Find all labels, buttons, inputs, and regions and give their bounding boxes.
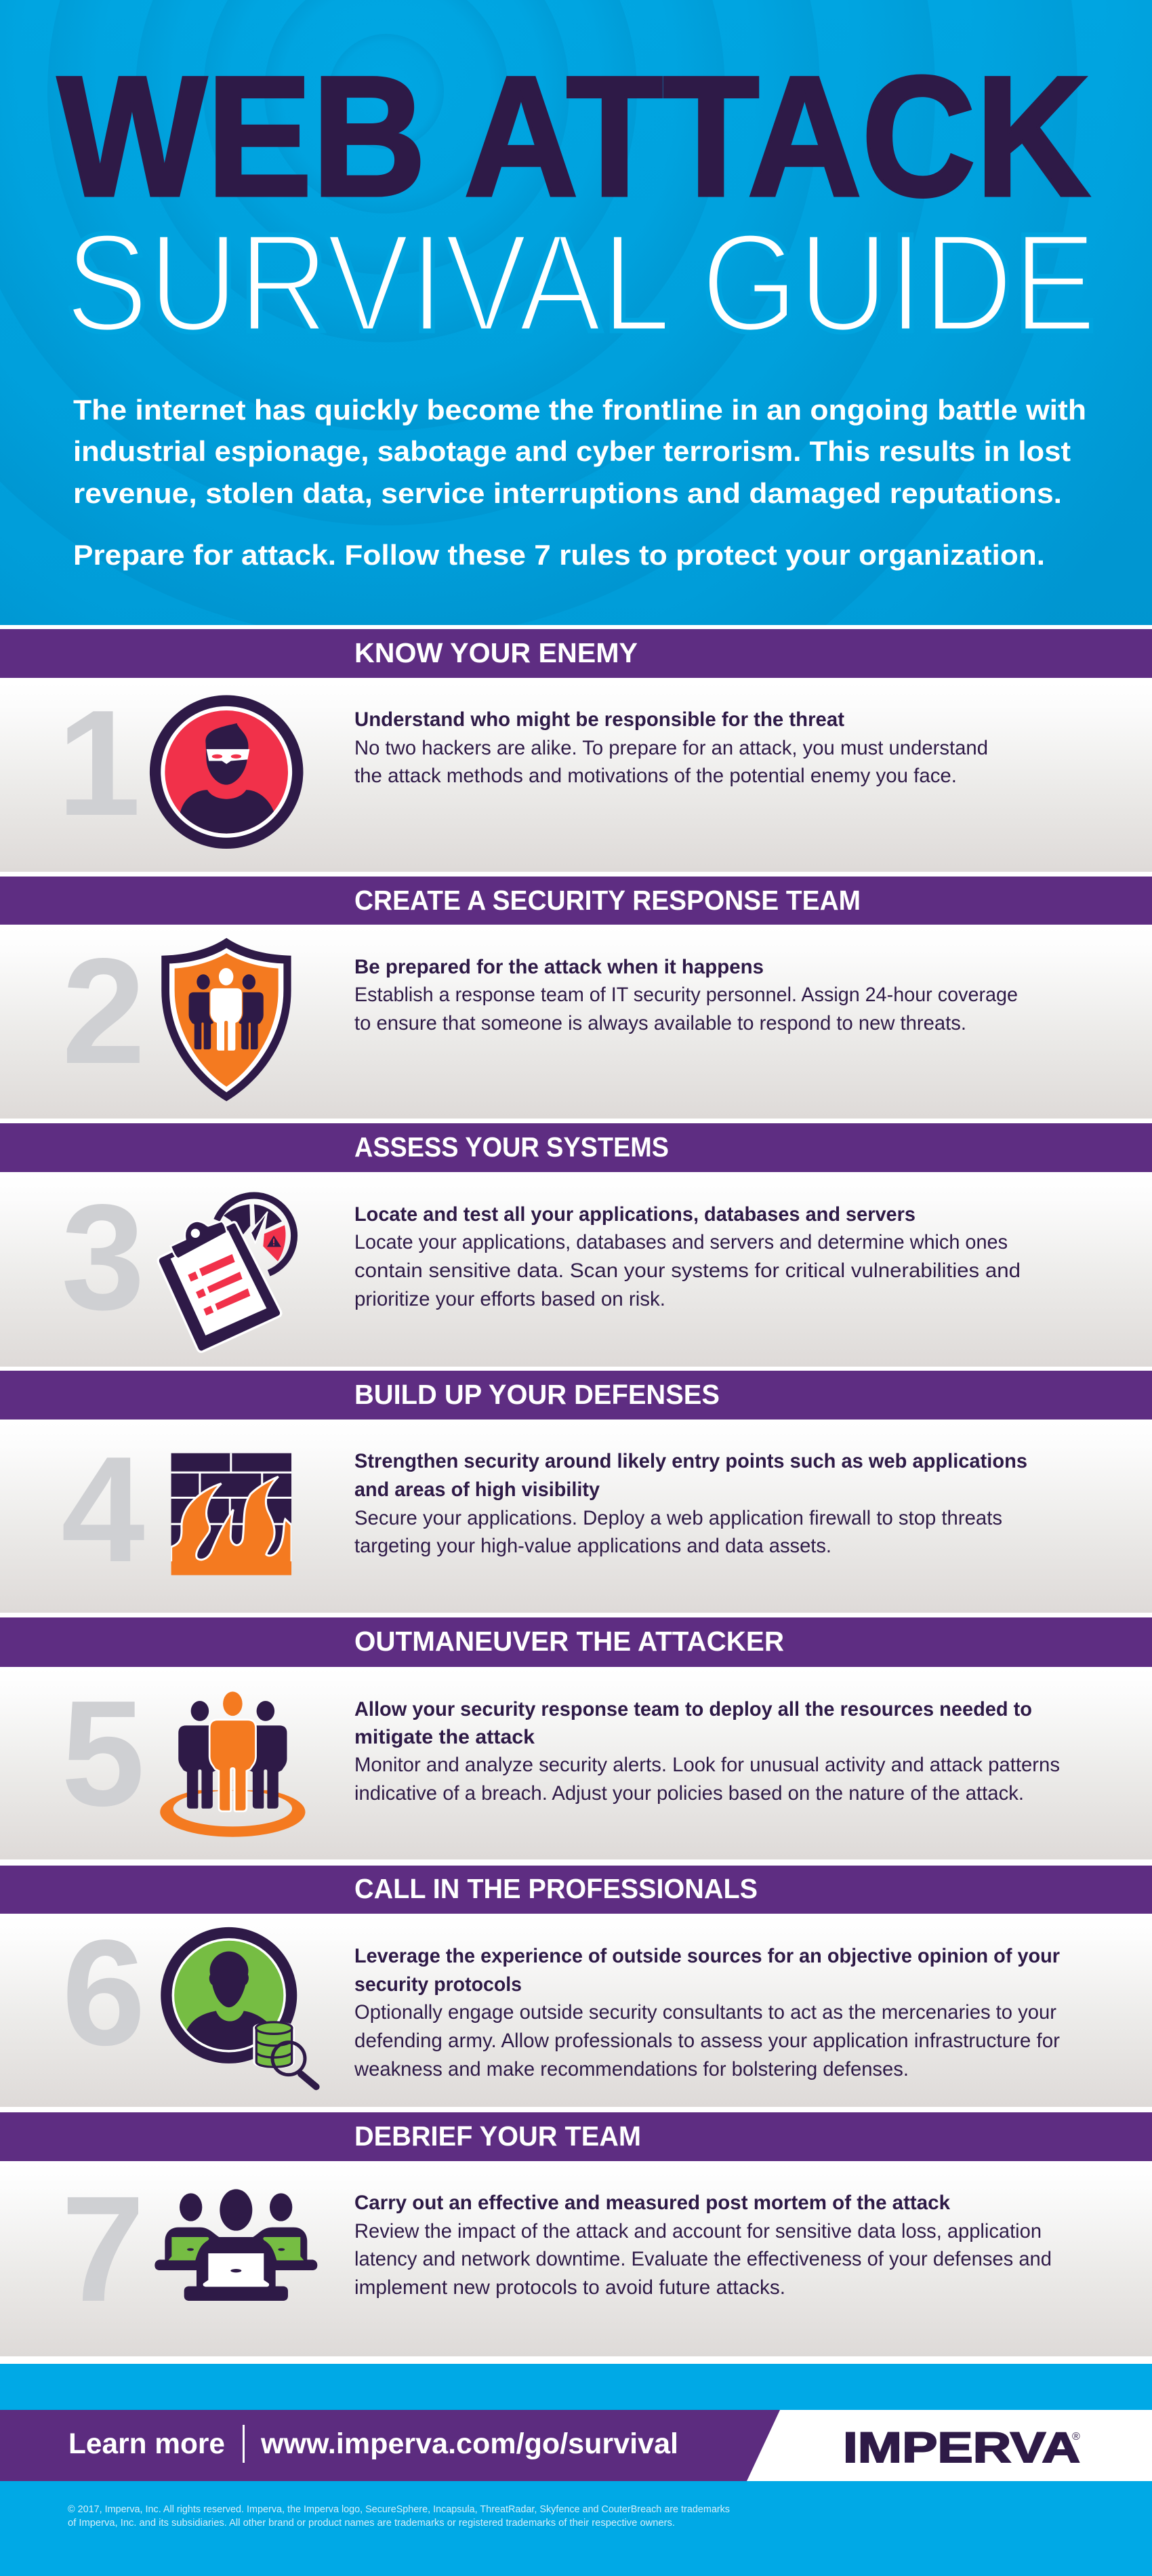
header bar 4: BUILD UP YOUR DEFENSES <box>354 1379 720 1410</box>
copyright <box>68 2503 730 2529</box>
header bar 3 <box>0 1123 1152 1172</box>
panel 6 <box>0 1916 1152 2107</box>
rule 6 text <box>354 1945 1060 2080</box>
rule 3 text: prioritize your efforts based on risk. <box>354 1288 665 1310</box>
rule 1 text <box>354 708 988 787</box>
rule 6 text: defending army. Allow professionals to assess your application infrastructure for <box>354 2030 1060 2052</box>
white logo strip <box>745 2410 1152 2481</box>
rule 5 text: Allow your security response team to deploy all the resources needed to <box>354 1698 1032 1720</box>
hero background with concentric rings <box>0 0 1152 625</box>
learn more: Learn more <box>68 2428 225 2460</box>
rule 1 text: No two hackers are alike. To prepare for an attack, you must understand <box>354 737 988 759</box>
rule 6 text: security protocols <box>354 1973 522 1996</box>
number 1: 1 <box>57 679 141 847</box>
rule 7 text: Review the impact of the attack and account for sensitive data loss, application <box>354 2220 1042 2242</box>
rule 7 text: Carry out an effective and measured post mortem of the attack <box>354 2192 950 2214</box>
intro paragraph: revenue, stolen data, service interruptions and damaged reputations. <box>73 477 1062 509</box>
number 6: 6 <box>62 1909 146 2077</box>
rule 6 text: Leverage the experience of outside sources for an objective opinion of your <box>354 1945 1060 1967</box>
rule 6 text: weakness and make recommendations for bolstering defenses. <box>354 2058 909 2080</box>
panel 3 <box>0 1175 1152 1367</box>
title: web attack: WEB ATTACK <box>58 41 1090 232</box>
section 4 <box>0 1371 1152 1613</box>
rule 4 text: and areas of high visibility <box>354 1478 600 1501</box>
number 2: 2 <box>62 927 146 1095</box>
intro paragraph: The internet has quickly become the frontline in an ongoing battle with <box>73 394 1086 426</box>
footer banner <box>0 2410 1152 2481</box>
section 2 <box>0 877 1152 1119</box>
rule 7 text <box>354 2192 1052 2299</box>
call to prepare: Prepare for attack. Follow these 7 rules to protect your organization. <box>73 539 1045 571</box>
consultant portrait <box>161 1927 297 2064</box>
rule 5 text: mitigate the attack <box>354 1726 535 1748</box>
icon: team in ring <box>160 1691 306 1837</box>
rule 2 text <box>354 956 1018 1034</box>
icon: consultant with database search <box>161 1927 316 2087</box>
header bar 1 <box>0 629 1152 678</box>
icon: shield with team <box>161 938 291 1101</box>
intro paragraph: industrial espionage, sabotage and cyber terrorism. This results in lost <box>73 435 1071 467</box>
imperva logo: IMPERVA <box>843 2424 1080 2472</box>
rule 2 text: Establish a response team of IT security personnel. Assign 24-hour coverage <box>354 984 1018 1006</box>
number 4: 4 <box>61 1426 145 1594</box>
header bar 6: CALL IN THE PROFESSIONALS <box>354 1873 758 1904</box>
database and magnifier <box>253 2021 316 2087</box>
header bar 5 <box>0 1617 1152 1667</box>
header bar 4 <box>0 1371 1152 1420</box>
icon: hacker <box>150 696 303 849</box>
url: www.imperva.com/go/survival <box>260 2428 678 2460</box>
rule 7 text: implement new protocols to avoid future attacks. <box>354 2276 785 2299</box>
rule 6 text: Optionally engage outside security consultants to act as the mercenaries to your <box>354 2001 1056 2024</box>
rule 1 text: the attack methods and motivations of the potential enemy you face. <box>354 765 957 787</box>
rule 2 text: Be prepared for the attack when it happens <box>354 956 764 978</box>
header bar 6 <box>0 1866 1152 1914</box>
rule 7 text: latency and network downtime. Evaluate the effectiveness of your defenses and <box>354 2248 1052 2270</box>
panel 4 <box>0 1422 1152 1613</box>
panel 1 <box>0 683 1152 872</box>
icon: team at laptops <box>155 2189 317 2301</box>
number 5: 5 <box>61 1670 145 1838</box>
divider <box>243 2425 245 2463</box>
header bar 1: KNOW YOUR ENEMY <box>354 637 638 668</box>
rule 5 text <box>354 1698 1060 1805</box>
header bar 2: CREATE A SECURITY RESPONSE TEAM <box>354 885 861 916</box>
icon: clipboard and gauge <box>158 1196 294 1352</box>
section 6 <box>0 1866 1152 2107</box>
footer blue background <box>0 2364 1152 2576</box>
rule 4 text: Secure your applications. Deploy a web application firewall to stop threats <box>354 1507 1002 1529</box>
header bar 2 <box>0 877 1152 925</box>
section 7 <box>0 2112 1152 2356</box>
rule 5 text: indicative of a breach. Adjust your policies based on the nature of the attack. <box>354 1782 1024 1805</box>
rule 3 text: Locate your applications, databases and servers and determine which ones <box>354 1231 1008 1253</box>
panel 5 <box>0 1669 1152 1859</box>
number 3: 3 <box>61 1173 145 1342</box>
copyright: © 2017, Imperva, Inc. All rights reserved. Imperva, the Imperva logo, SecureSphere, Incapsula, ThreatRadar, Skyfence and CouterBreach are trademarks <box>68 2503 730 2515</box>
rule 4 text: targeting your high-value applications and data assets. <box>354 1535 831 1557</box>
rule 3 text: contain sensitive data. Scan your systems for critical vulnerabilities and <box>354 1260 1021 1282</box>
section 3 <box>0 1123 1152 1367</box>
rule 3 text <box>354 1203 1021 1310</box>
header bar 3: ASSESS YOUR SYSTEMS <box>354 1131 669 1163</box>
rule 3 text: Locate and test all your applications, databases and servers <box>354 1203 916 1226</box>
panel 2 <box>0 927 1152 1119</box>
section 1 <box>0 629 1152 872</box>
header bar 5: OUTMANEUVER THE ATTACKER <box>354 1626 784 1657</box>
header bar 7: DEBRIEF YOUR TEAM <box>354 2120 641 2152</box>
imperva logo: ® <box>1072 2431 1080 2442</box>
rule 5 text: Monitor and analyze security alerts. Look for unusual activity and attack patterns <box>354 1754 1060 1776</box>
purple link strip <box>0 2410 780 2481</box>
rule 1 text: Understand who might be responsible for the threat <box>354 708 844 731</box>
panel 7 <box>0 2163 1152 2356</box>
copyright: of Imperva, Inc. and its subsidiaries. All other brand or product names are trademarks or registered trademarks of their respective owners. <box>68 2517 675 2529</box>
icon: firewall <box>171 1453 291 1575</box>
header bar 7 <box>0 2112 1152 2161</box>
number 7: 7 <box>61 2165 145 2333</box>
rule 4 text: Strengthen security around likely entry points such as web applications <box>354 1450 1027 1472</box>
intro paragraph <box>73 394 1086 509</box>
section 5 <box>0 1617 1152 1859</box>
rule 4 text <box>354 1450 1027 1557</box>
rule 2 text: to ensure that someone is always available to respond to new threats. <box>354 1012 966 1034</box>
